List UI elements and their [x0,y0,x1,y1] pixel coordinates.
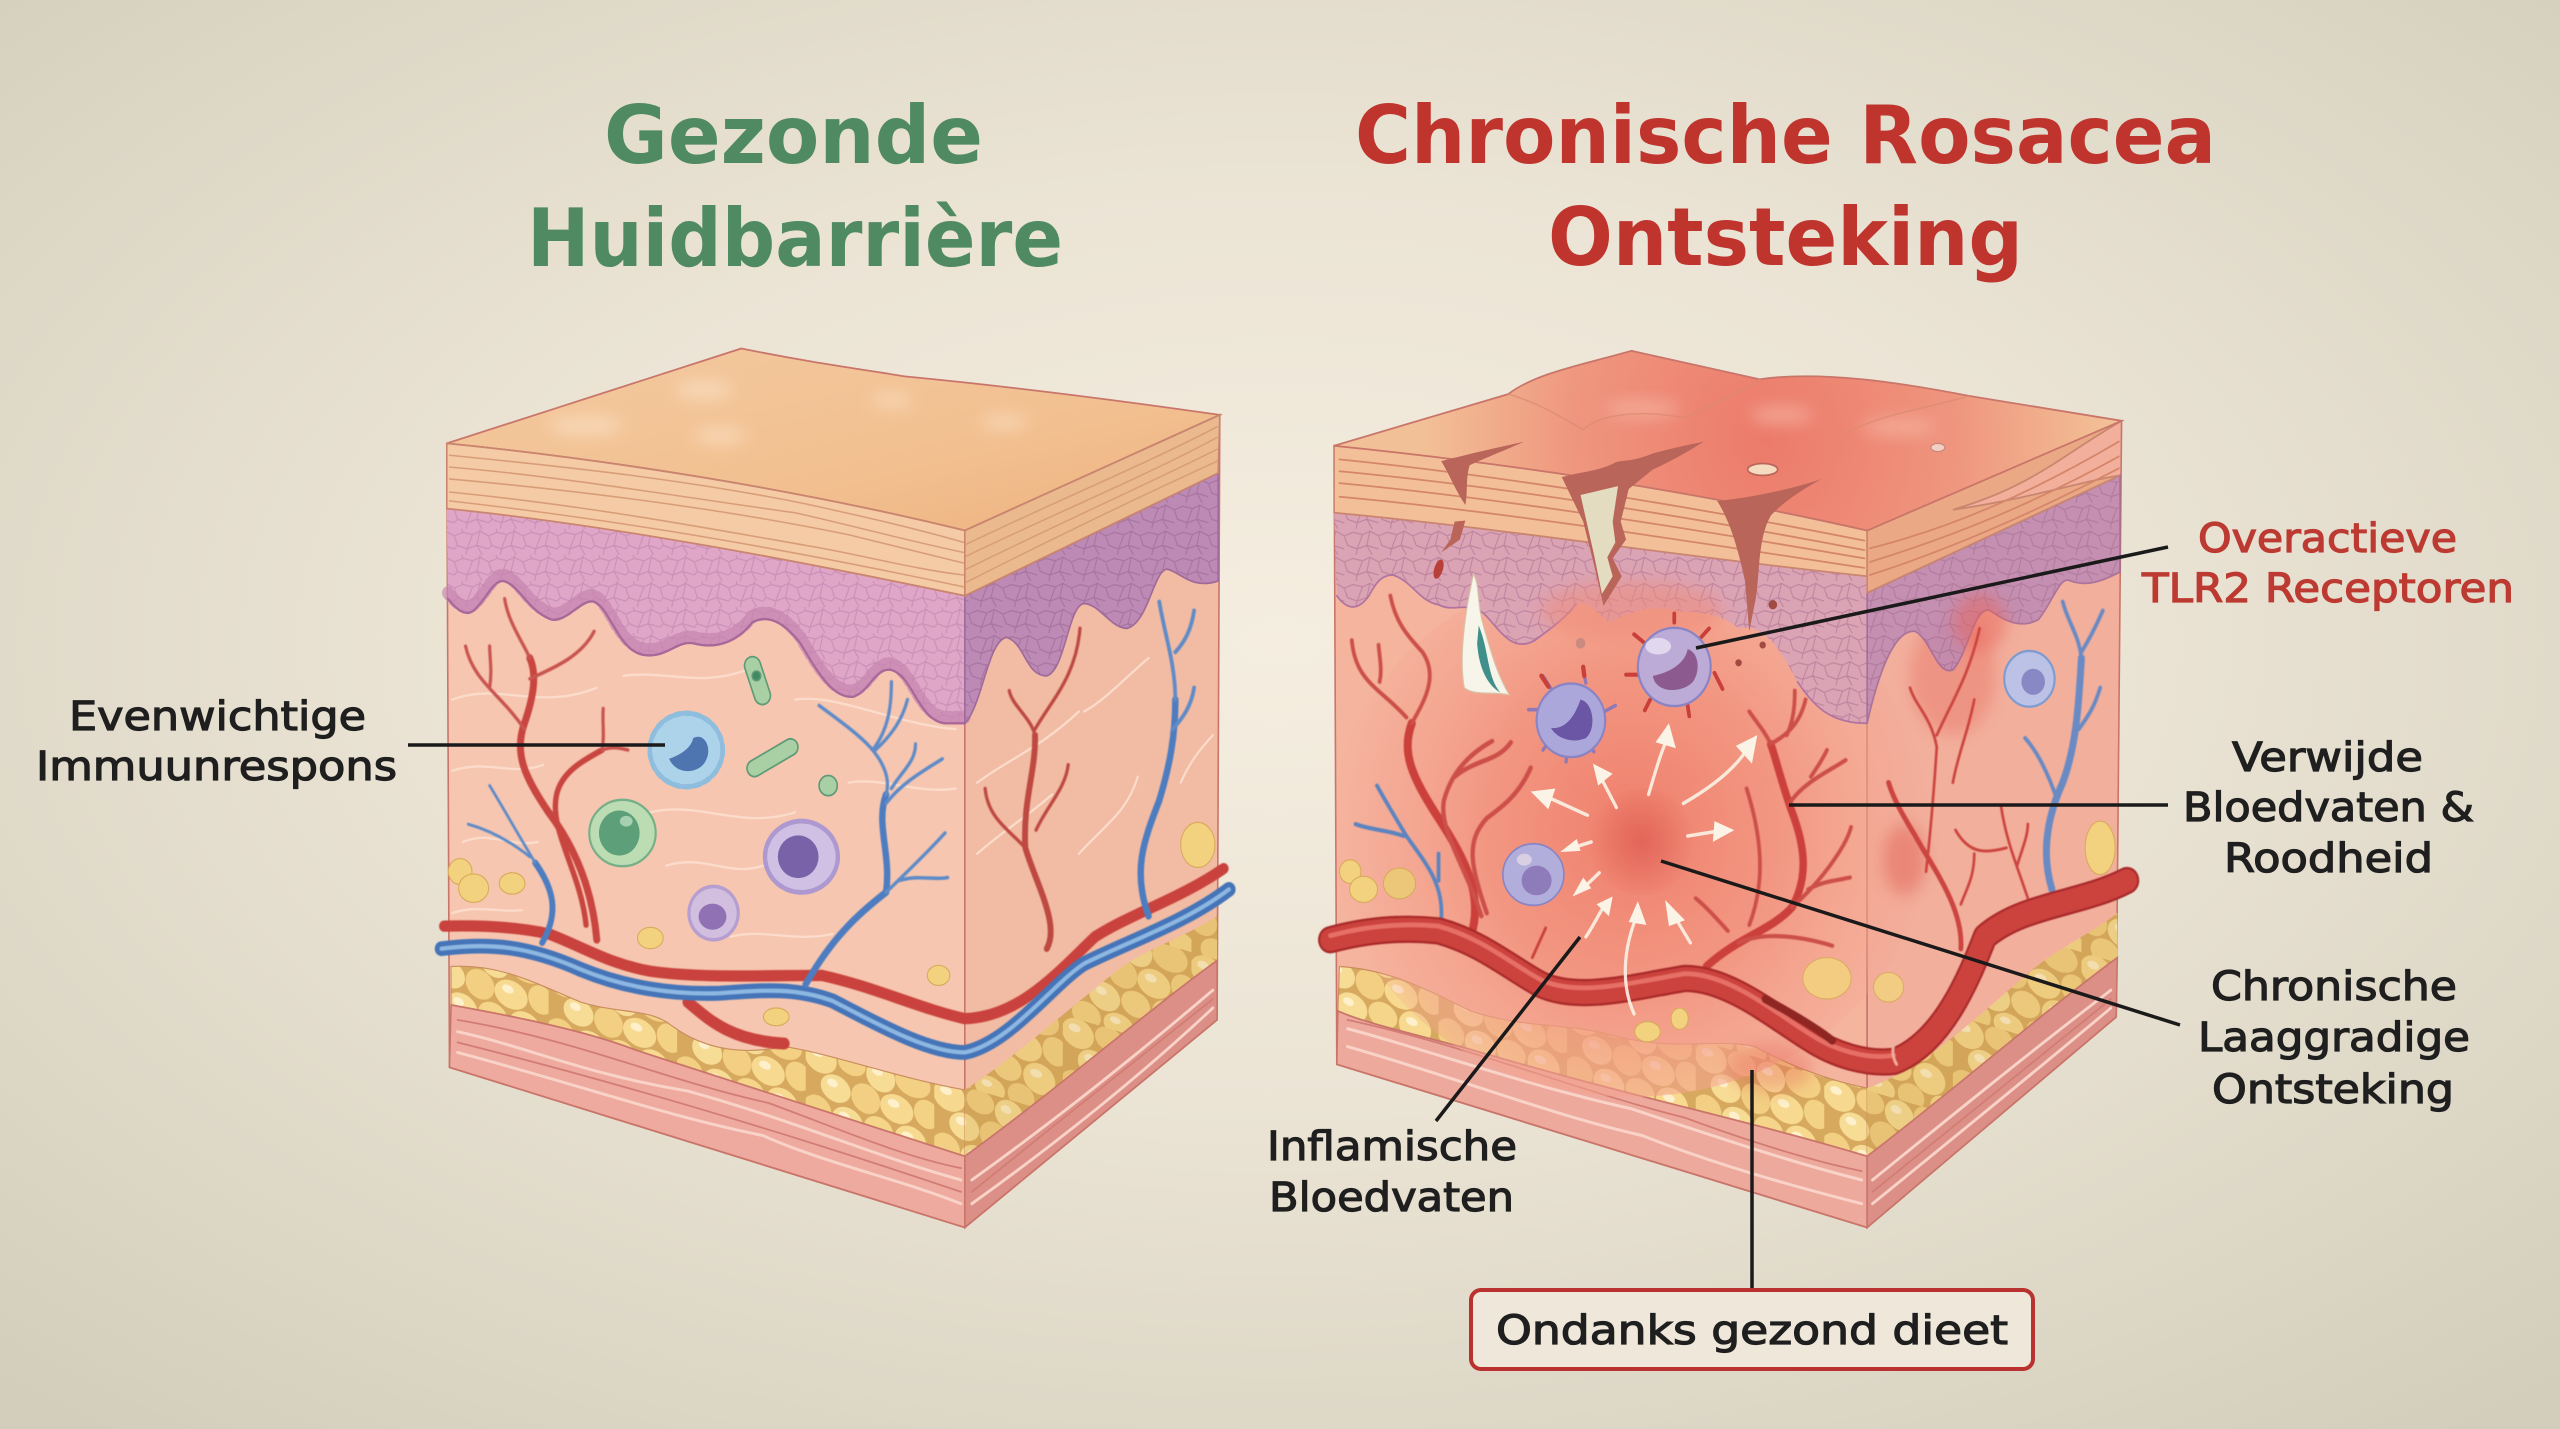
label: inflammatory blood vessels [1267,1124,1517,1221]
front face dermis [1334,446,1867,1227]
label: inflammatory blood vessels: Bloedvaten [1269,1175,1514,1221]
title: chronic rosacea inflammation: Ontsteking [1548,191,2023,284]
inflammation arrows [1531,723,1757,1014]
immune cell side face [2004,651,2055,707]
title: healthy skin barrier [527,89,1063,285]
bacteria [742,654,837,796]
immune cell: purple large [763,819,840,895]
blue veins [1356,602,2103,919]
label: inflammatory blood vessels: Inflamische [1267,1124,1517,1170]
label: overactive TLR2 receptors: TLR2 Receptoren [2141,566,2514,612]
label: chronic low-grade inflammation [2198,964,2470,1113]
title: chronic rosacea inflammation: Chronische Rosacea [1355,89,2216,182]
label: dilated blood vessels and redness [2183,735,2474,882]
fat droplets [1339,821,2115,1042]
label: dilated blood vessels and redness: Bloedvaten & [2183,785,2474,831]
top surface [1334,351,2122,531]
arteries [444,599,1224,1044]
healthy skin cube [441,348,1229,1227]
open wound [1462,574,1509,695]
fat layer [451,916,1217,1156]
dermis fibres [452,658,1213,937]
stratum corneum [447,415,1220,596]
leader lines [408,547,2180,1289]
fat droplets [448,822,1215,1026]
label: chronic low-grade inflammation: Chronische [2211,964,2457,1010]
immune cell: purple small [687,885,740,942]
label: overactive TLR2 receptors [2141,516,2514,612]
stratum corneum [1334,421,2122,593]
inflamed redness [1331,563,1996,1097]
label: dilated blood vessels and redness: Verwijde [2232,735,2423,781]
label: overactive TLR2 receptors: Overactieve [2198,516,2457,562]
label: balanced immune response [36,694,397,790]
muscle layer [449,961,1217,1227]
title: chronic rosacea inflammation [1355,89,2216,284]
veins [441,602,1229,1052]
overactive immune cell with TLR2 [1626,614,1722,716]
label: chronic low-grade inflammation: Ontsteking [2212,1067,2454,1113]
rosacea skin cube [1330,351,2127,1227]
epidermis layer [1334,475,2120,723]
overactive immune cell left [1529,667,1615,762]
label: balanced immune response: Evenwichtige [69,694,366,740]
label: dilated blood vessels and redness: Roodheid [2224,836,2433,882]
dilated branching vessels [1352,596,2028,966]
immune cell: green [589,800,656,866]
label: chronic low-grade inflammation: Laaggradige [2198,1015,2470,1061]
callout: despite healthy diet: Ondanks gezond dieet [1496,1308,2008,1354]
side face dermis [1867,421,2122,1227]
top surface [447,348,1220,531]
skin cracks [1431,442,1945,666]
epidermis layer [447,473,1218,723]
label: balanced immune response: Immuunrespons [36,744,397,790]
muscle layer [1337,958,2117,1227]
title: healthy skin barrier: Gezonde [604,89,983,182]
callout: despite healthy diet [1471,1290,2033,1369]
immune cell lower left [1503,844,1564,905]
fat layer [1338,913,2117,1156]
main dilated artery [1330,880,2127,1064]
immune cell: blue, balanced response [648,711,725,789]
side face dermis [965,415,1220,1227]
front face dermis [447,443,965,1227]
title: healthy skin barrier: Huidbarrière [527,192,1063,285]
